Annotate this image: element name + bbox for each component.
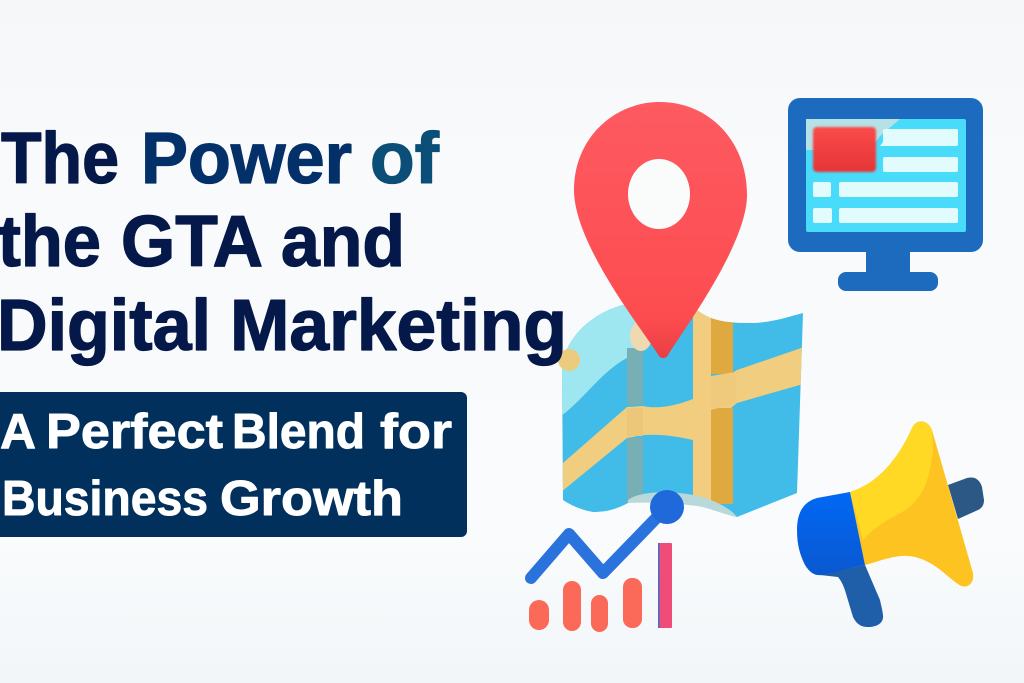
subtitle banner bbox=[0, 392, 467, 537]
subtitle text: Blend bbox=[232, 405, 365, 459]
title: and bbox=[281, 202, 405, 282]
subtitle text: A bbox=[0, 405, 36, 459]
subtitle text: Growth bbox=[220, 472, 403, 526]
title: the bbox=[0, 202, 101, 282]
icon: location pin bbox=[574, 102, 747, 358]
title: GTA bbox=[121, 202, 263, 282]
subtitle text: Business bbox=[2, 472, 208, 526]
trend line bbox=[531, 490, 684, 578]
icon: megaphone bbox=[797, 421, 984, 627]
monitor red image block bbox=[813, 127, 876, 172]
title: Marketing bbox=[230, 286, 567, 366]
map bottom fold bbox=[628, 492, 737, 517]
bars bbox=[529, 543, 672, 632]
subtitle text: for bbox=[380, 405, 452, 459]
map peach fold bbox=[630, 321, 652, 351]
subtitle text: Perfect bbox=[46, 405, 223, 459]
title bbox=[0, 119, 567, 366]
title: The bbox=[1, 119, 119, 199]
title: Power bbox=[141, 119, 352, 199]
map marker dot bbox=[558, 349, 580, 371]
title: of bbox=[370, 119, 440, 199]
icon: map bbox=[555, 300, 810, 517]
icon: growth chart bbox=[529, 490, 684, 632]
title: Digital bbox=[0, 286, 211, 366]
icon: computer monitor bbox=[788, 98, 983, 291]
subtitle text bbox=[0, 405, 452, 526]
